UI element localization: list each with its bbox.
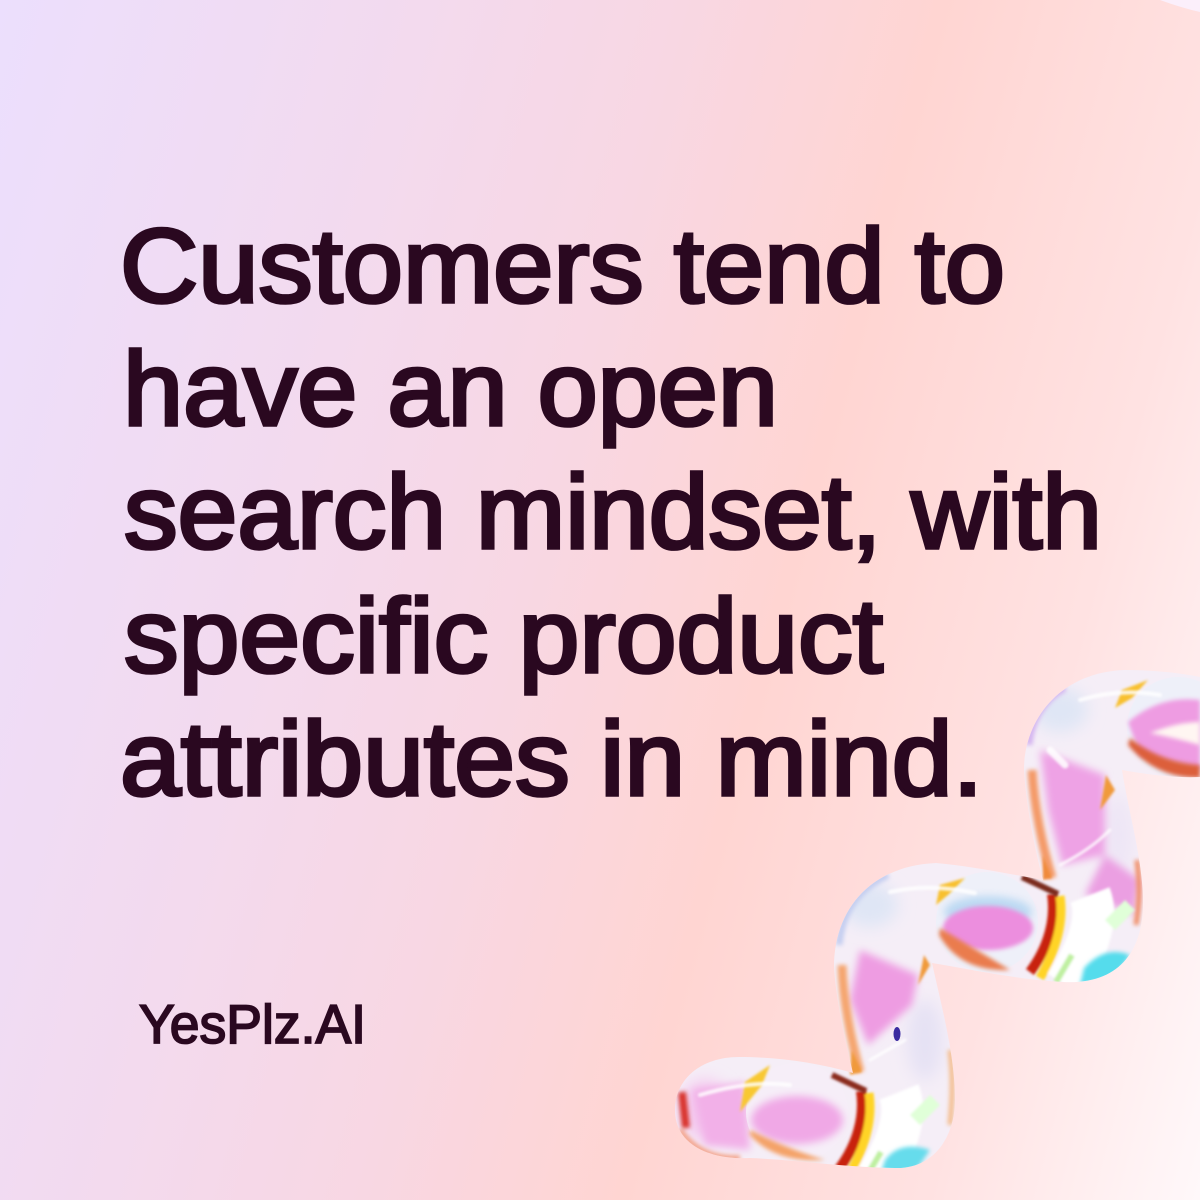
headline: specific product (124, 578, 883, 695)
soft lavender and blue shading (680, 688, 1134, 1140)
headline: attributes in mind. (120, 701, 983, 818)
headline: search mindset, with (124, 454, 1102, 571)
headline: have an open (123, 331, 778, 448)
iridescent glass ribbon (660, 650, 1200, 1182)
bottom lens (746, 1092, 847, 1163)
pink panels (692, 750, 1140, 1150)
headline: Customers tend to (120, 208, 1005, 325)
rainbow band: bottom (839, 1091, 935, 1182)
yellow flecks (740, 680, 1148, 1112)
top lens (1125, 697, 1200, 778)
middle lens (936, 888, 1038, 974)
edge tints (680, 688, 1139, 1158)
rainbow band: middle (1030, 894, 1130, 985)
brand logo text: YesPlz.AI (139, 993, 366, 1055)
headline (120, 208, 1102, 818)
small dark fleck (894, 1027, 900, 1041)
white highlights (700, 692, 1160, 1095)
corner highlight (1160, 0, 1200, 12)
